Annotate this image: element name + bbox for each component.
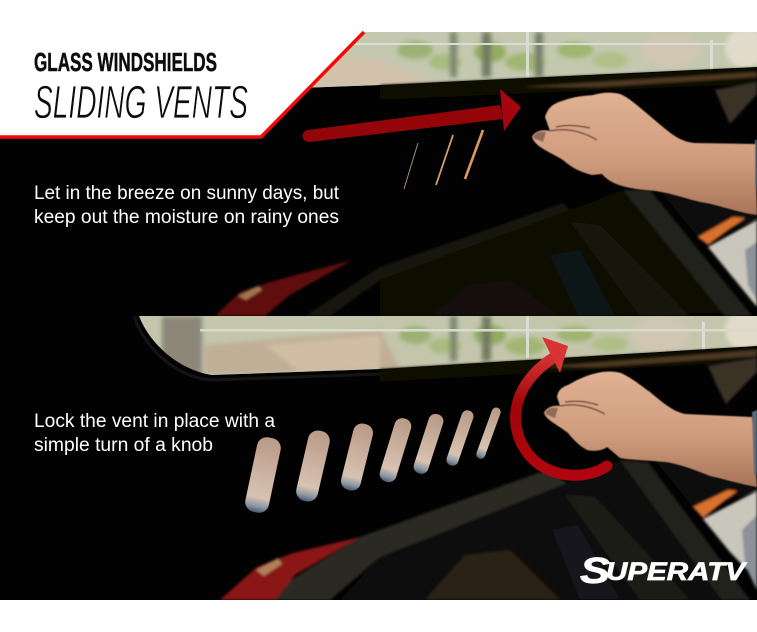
dashboard and cab interior [220, 347, 757, 600]
window view with trees and fence [139, 316, 757, 375]
text block: lock the vent: simple turn of a knob [34, 435, 213, 456]
safety label on the frame [693, 490, 737, 518]
text block: breeze and moisture: Let in the breeze on sunny days, but [34, 183, 340, 204]
red roll cage tube [215, 260, 352, 316]
safety label on the frame [698, 217, 745, 245]
seven open vent slots [243, 406, 502, 515]
hand turning the knob [532, 93, 757, 215]
panel: bottom photo, vent locked with knob [0, 310, 757, 600]
text block: lock the vent [34, 411, 275, 456]
text block: breeze and moisture [34, 183, 340, 228]
arrow: slide direction [302, 89, 521, 142]
red roll cage tube [220, 537, 360, 600]
title: glass windshields: GLASS WINDSHIELDS [34, 47, 217, 77]
text block: breeze and moisture: keep out the moisture on rainy ones [34, 207, 339, 228]
light slits of the closing vent [404, 130, 483, 189]
text block: lock the vent: Lock the vent in place with a [34, 411, 275, 432]
logo: SuperATV: S [580, 550, 610, 591]
logo: SuperATV: UPERATV [606, 558, 748, 586]
logo: SuperATV [580, 557, 748, 584]
title: sliding vents: SLIDING VENTS [34, 76, 248, 128]
dashboard and cab interior [215, 68, 757, 316]
panel: top photo, sliding vent open by hand [0, 28, 757, 316]
curved window frame [132, 316, 380, 382]
hand turning the knob [544, 372, 757, 487]
window view with trees and fence [312, 32, 757, 88]
curved arrow: turn the knob [516, 337, 607, 475]
header banner with red edge [0, 32, 364, 137]
